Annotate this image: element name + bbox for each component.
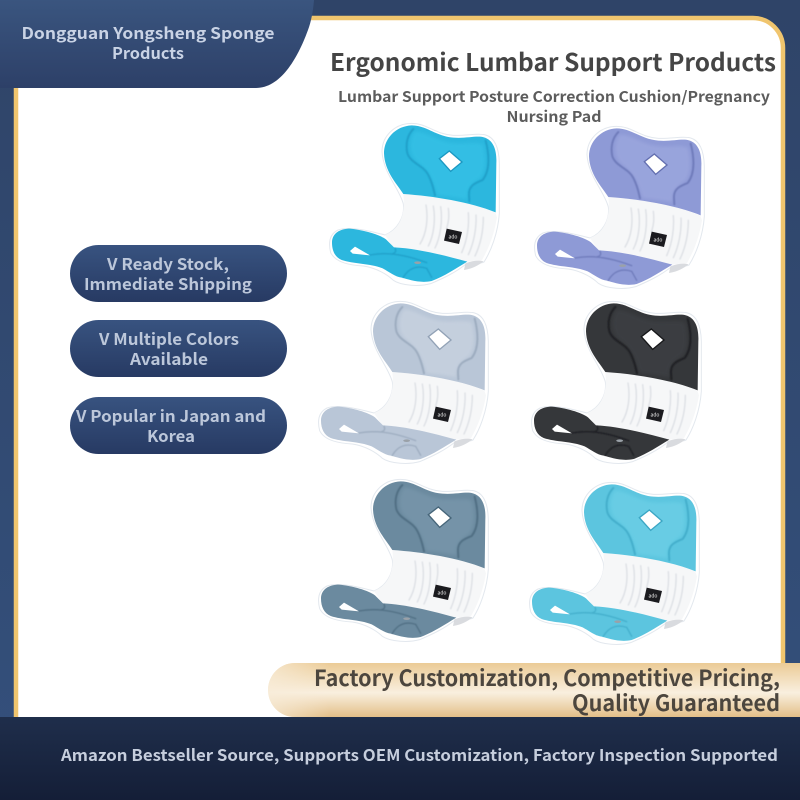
subtitle: Nursing Pad	[506, 106, 602, 127]
header badge: company name: Products	[112, 40, 184, 64]
title: Ergonomic Lumbar Support Products	[330, 43, 776, 78]
feature pill: multiple colors: V Multiple Colors	[98, 326, 239, 350]
header badge: company name	[0, 0, 314, 88]
feature pill: popular in Japan and Korea: V Popular in Japan and	[75, 403, 266, 427]
feature pill: ready stock	[70, 245, 287, 302]
footer band: Amazon Bestseller Source, Supports OEM Customization, Factory Inspection Supported	[60, 742, 778, 766]
product: light grey cushion	[319, 301, 488, 463]
header badge: company name: Dongguan Yongsheng Sponge	[22, 20, 274, 44]
gold banner: customization callout	[268, 661, 800, 718]
feature pill: multiple colors	[70, 320, 287, 377]
footer band	[0, 717, 800, 800]
product: lavender cushion	[535, 126, 704, 288]
subtitle: Lumbar Support Posture Correction Cushion/Pregnancy	[338, 86, 770, 107]
product: cyan blue cushion	[330, 123, 499, 285]
feature pill: multiple colors: Available	[129, 346, 208, 370]
gold banner: customization callout: Quality Guaranteed	[572, 686, 780, 718]
product: sky blue cushion	[530, 482, 699, 644]
feature pill: popular in Japan and Korea	[70, 397, 287, 454]
subtitle	[338, 86, 770, 127]
feature pill: ready stock: V Ready Stock,	[106, 251, 229, 275]
gold banner: customization callout: Factory Customization, Competitive Pricing,	[314, 661, 780, 693]
product: black cushion	[532, 301, 701, 463]
product: slate blue cushion	[319, 479, 488, 641]
feature pill: ready stock: Immediate Shipping	[84, 271, 252, 295]
feature pill: popular in Japan and Korea: Korea	[147, 423, 195, 447]
